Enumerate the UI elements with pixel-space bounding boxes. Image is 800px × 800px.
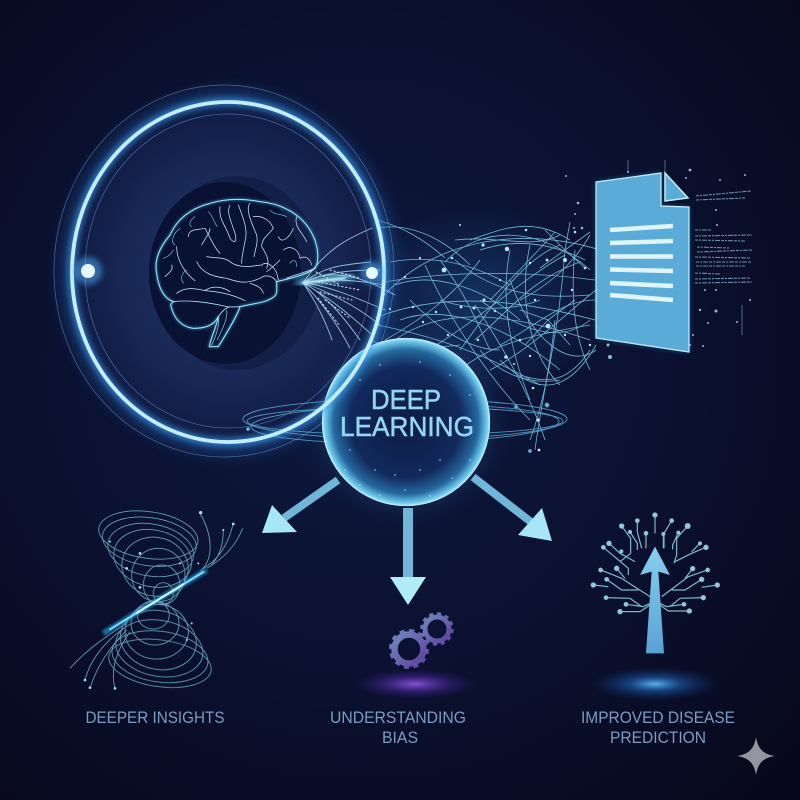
label: improved disease prediction	[581, 709, 735, 747]
inner thin ring	[85, 114, 371, 428]
orbit rings around sphere	[243, 399, 567, 452]
label: understanding bias: UNDERSTANDING	[330, 709, 466, 727]
arrow: to understanding bias	[390, 508, 426, 605]
ring node: right	[360, 261, 384, 285]
bright ring stroke	[72, 102, 384, 442]
ring glow	[72, 102, 384, 442]
label: understanding bias	[330, 709, 466, 747]
arrow: to deeper insights	[262, 480, 338, 533]
label: understanding bias: BIAS	[382, 729, 418, 747]
icon: gears	[391, 614, 452, 667]
outer thin ring	[54, 85, 394, 457]
document body	[596, 173, 689, 352]
label: improved disease prediction: IMPROVED DISEASE	[581, 709, 735, 727]
sphere title: DEEP	[371, 384, 441, 415]
ring interior	[74, 104, 382, 440]
icon: vortex insights	[70, 505, 243, 694]
data stream from brain	[300, 228, 395, 348]
ring node: left	[74, 257, 102, 285]
icon: tree with rising arrow	[591, 512, 720, 653]
sphere title: LEARNING	[340, 411, 474, 442]
gear one	[391, 631, 427, 667]
gear two	[422, 614, 452, 644]
icon: sparkle	[737, 737, 775, 775]
document lines	[610, 226, 673, 300]
icon: document	[596, 173, 689, 352]
label: improved disease prediction: PREDICTION	[610, 729, 706, 747]
sphere: deep learning	[310, 326, 502, 518]
network of data connections	[330, 205, 605, 451]
panel: neural ring	[54, 85, 395, 457]
glow: purple	[353, 669, 477, 699]
label: deeper insights: DEEPER INSIGHTS	[86, 709, 224, 727]
sphere title	[340, 384, 474, 442]
document fold	[665, 173, 688, 201]
brain	[156, 199, 318, 347]
glow: blue	[589, 667, 721, 701]
rising arrow	[640, 547, 670, 653]
code fragments beside document	[628, 160, 752, 335]
dark disc	[149, 182, 301, 364]
inner rim	[153, 176, 321, 370]
arrow: to improved disease prediction	[473, 477, 552, 541]
